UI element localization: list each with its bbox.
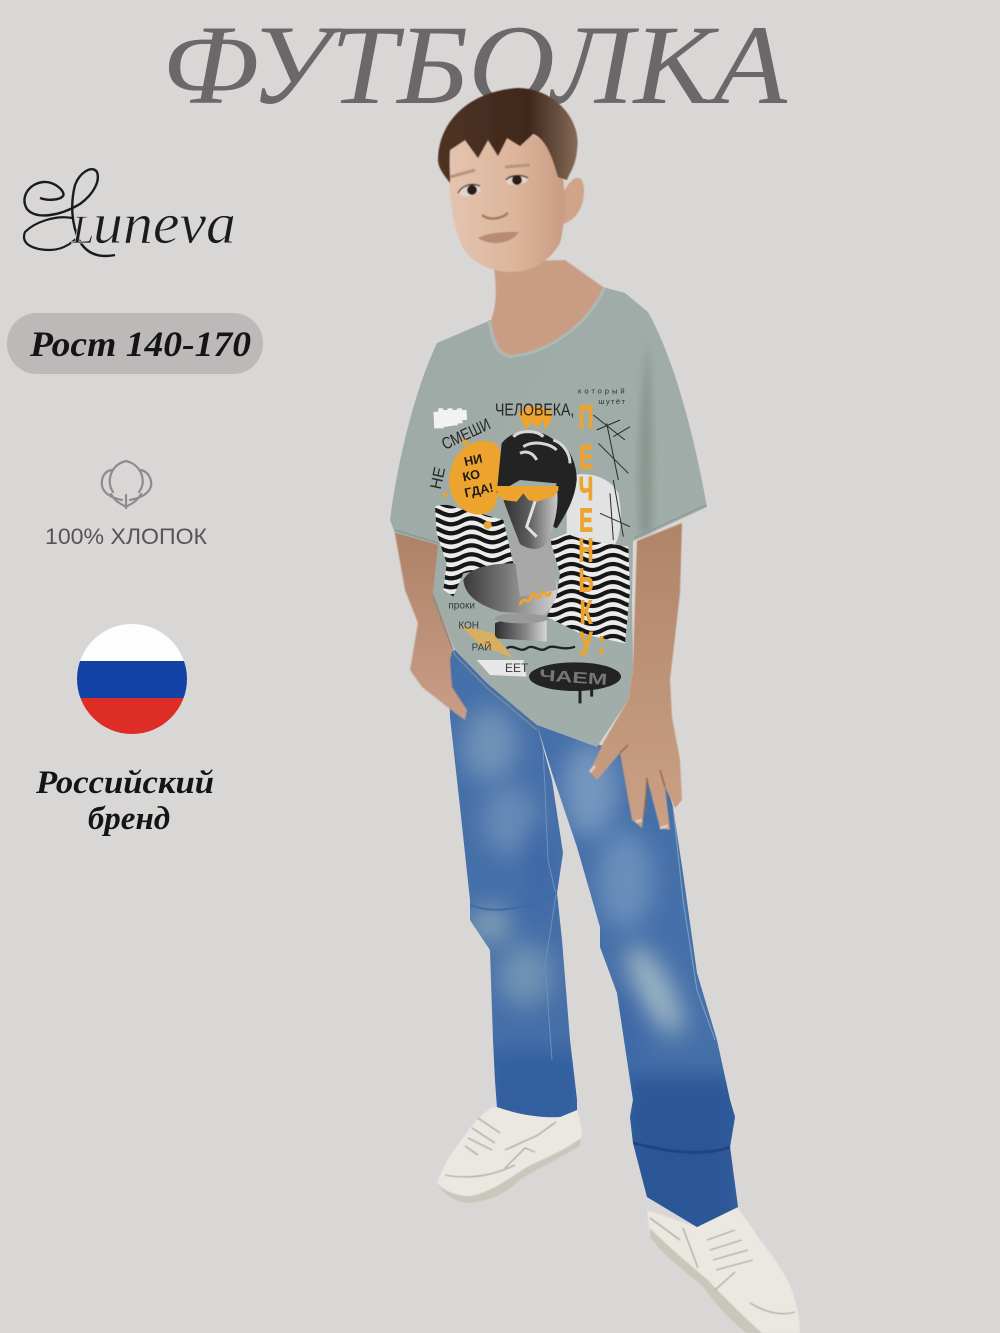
print: small smudged text: ЕЕТ	[505, 661, 529, 675]
eyes	[450, 165, 530, 198]
photo: boy in t-shirt	[390, 88, 800, 1333]
print: slogan line: шутёт	[598, 397, 625, 406]
height badge: Рост 140-170	[29, 324, 251, 364]
print: wave stripes right	[546, 534, 630, 644]
hair	[438, 88, 578, 183]
left shoe	[437, 1107, 582, 1203]
print: black spray label	[529, 662, 621, 703]
print: scratch lines	[593, 415, 630, 540]
nose	[482, 213, 508, 219]
print: cookie with text: ГДА!	[463, 481, 495, 500]
print: orange splat	[518, 406, 552, 430]
logo: Luneva	[24, 169, 236, 256]
print: black spray label: ЧАЕМ	[539, 667, 608, 689]
print: pixel sunglasses	[497, 486, 558, 502]
left arm and hand	[394, 528, 467, 720]
print: vertical word: ПЕЧЕНЬКУ:	[579, 398, 605, 662]
jeans: right leg	[530, 720, 745, 1240]
right arm and hand	[590, 523, 682, 830]
print: slogan line: который	[578, 386, 625, 395]
print: bust	[463, 431, 577, 642]
mouth	[478, 232, 519, 243]
print: cookie with text	[443, 439, 502, 529]
print: small smudged text: КОН	[458, 620, 479, 631]
title: ФУТБОЛКА	[162, 3, 788, 128]
brand origin text: Российский	[35, 765, 214, 801]
print: small smudged text: проки	[448, 600, 475, 611]
shirt print	[420, 386, 727, 703]
print: wave stripes left	[435, 504, 514, 596]
print: slogan line: ЧЕЛОВЕКА,	[495, 400, 574, 420]
icon: cotton boll	[102, 461, 151, 508]
right shoe	[647, 1207, 800, 1333]
jeans: left leg	[449, 650, 577, 1118]
print: orange scribble	[520, 592, 551, 605]
print: cookie with text: НИ	[463, 452, 484, 469]
brand origin text	[35, 765, 214, 837]
logo: Luneva: L	[71, 207, 94, 252]
cotton label: 100% ХЛОПОК	[45, 524, 207, 549]
print: small smudged text: РАЙ	[472, 641, 491, 654]
print: cookie with text: КО	[461, 467, 482, 484]
ear	[562, 178, 584, 224]
face	[449, 129, 565, 272]
print: white spray panel	[567, 474, 621, 547]
icon: russian flag	[77, 624, 187, 734]
print: slogan line: СМЕШИ	[439, 415, 494, 454]
brand origin text: бренд	[88, 801, 170, 837]
height badge	[7, 313, 263, 374]
print: small smudged text	[448, 600, 575, 677]
print: slogan line: НЕ	[428, 466, 449, 491]
print: white scribble	[436, 408, 465, 428]
neck	[491, 260, 603, 355]
t-shirt	[390, 287, 727, 747]
print: slogan line	[428, 386, 625, 491]
logo: Luneva: uneva	[93, 191, 236, 256]
